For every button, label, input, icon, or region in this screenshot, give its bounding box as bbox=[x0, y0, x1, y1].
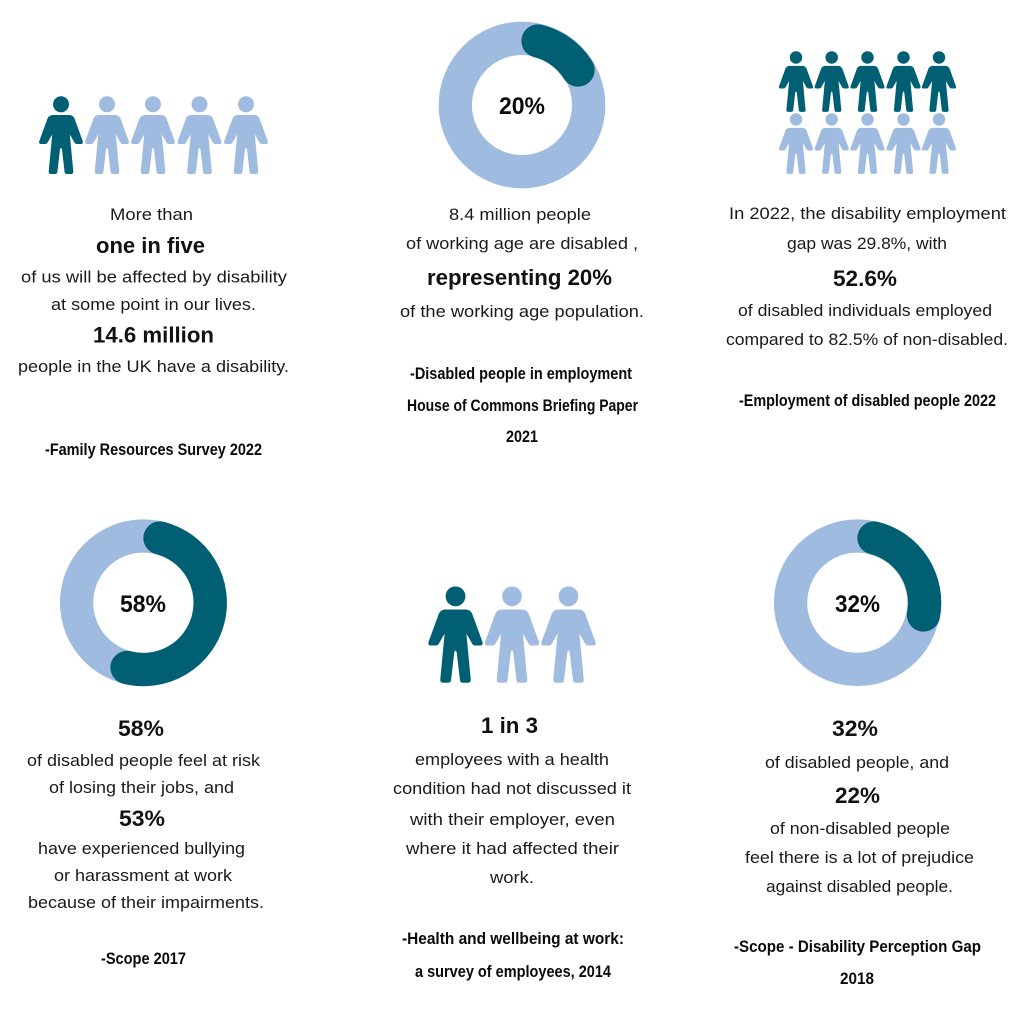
citation: Scope Disability Perception Gap bbox=[734, 937, 981, 988]
citation: House of Commons Briefing Paper: House of Commons Briefing Paper bbox=[407, 396, 638, 415]
citation: Scope Disability Perception Gap: 2018 bbox=[840, 969, 874, 988]
text: job risk statistics: or harassment at work bbox=[54, 866, 233, 885]
panel: disability employment gap bbox=[726, 51, 1008, 410]
text: health condition statistics: employees with a health bbox=[415, 750, 609, 769]
text: job risk statistics: of losing their jobs, and bbox=[49, 778, 234, 797]
text: prejudice statistics: against disabled people. bbox=[766, 877, 953, 896]
text: working age statistics bbox=[400, 205, 644, 321]
donut chart: 32% bbox=[791, 536, 925, 669]
text: working age statistics: of the working age population. bbox=[400, 302, 644, 321]
text: working age statistics: representing 20% bbox=[427, 265, 612, 290]
panel: one in three employees bbox=[393, 586, 631, 981]
icon: five people, one highlighted bbox=[39, 96, 268, 174]
citation: Health and wellbeing at work: -Health and wellbeing at work: bbox=[402, 929, 624, 948]
text: job risk statistics: have experienced bullying bbox=[38, 839, 245, 858]
text: prejudice statistics: of non-disabled people bbox=[770, 819, 950, 838]
text: health condition statistics: where it had affected their bbox=[405, 839, 619, 858]
text: one in five statistics: of us will be affected by disability bbox=[21, 268, 288, 286]
text: prejudice statistics: of disabled people, and bbox=[765, 753, 949, 772]
text: working age statistics: 8.4 million people bbox=[449, 205, 591, 224]
citation: Family Resources Survey: -Family Resources Survey 2022 bbox=[45, 440, 262, 459]
text: one in five statistics: people in the UK have a disability. bbox=[18, 357, 289, 376]
citation: Scope 2017: -Scope 2017 bbox=[101, 949, 186, 968]
text: employment gap statistics: In 2022, the disability employment bbox=[729, 204, 1006, 223]
donut chart: 32%: 32% bbox=[835, 591, 880, 618]
text: employment gap statistics: of disabled individuals employed bbox=[738, 301, 992, 320]
text: one in five statistics: one in five bbox=[96, 233, 205, 258]
donut chart: 20%: 20% bbox=[499, 93, 545, 120]
panel: 20 percent of working age bbox=[400, 38, 644, 446]
text: employment gap statistics bbox=[726, 204, 1008, 349]
text: job risk statistics: 53% bbox=[119, 806, 165, 831]
donut chart: 20% bbox=[455, 38, 589, 172]
text: one in five statistics: More than bbox=[110, 205, 193, 224]
donut chart: 58% bbox=[77, 536, 210, 670]
donut chart: 58%: 58% bbox=[120, 591, 166, 618]
text: health condition statistics: condition had not discussed it bbox=[393, 779, 631, 798]
text: prejudice statistics: 32% bbox=[832, 716, 878, 741]
panel: risk of losing jobs bbox=[27, 536, 264, 968]
text: one in five statistics bbox=[18, 205, 289, 376]
citation: Health and wellbeing at work: a survey of employees, 2014 bbox=[415, 962, 611, 981]
text: prejudice statistics: feel there is a lot of prejudice bbox=[745, 848, 974, 867]
icon: ten people, five highlighted bbox=[779, 51, 956, 174]
text: employment gap statistics: compared to 82.5% of non-disabled. bbox=[726, 330, 1008, 349]
text: employment gap statistics: 52.6% bbox=[833, 266, 897, 291]
text: job risk statistics bbox=[27, 716, 264, 912]
text: prejudice statistics: 22% bbox=[835, 783, 880, 808]
text: job risk statistics: 58% bbox=[118, 716, 164, 741]
text: employment gap statistics: gap was 29.8%, with bbox=[787, 234, 947, 253]
text: health condition statistics: with their employer, even bbox=[409, 810, 615, 829]
citation: Scope Disability Perception Gap: -Scope - Disability Perception Gap bbox=[734, 937, 981, 956]
text: job risk statistics: of disabled people feel at risk bbox=[27, 751, 261, 770]
panel: prejudice perception bbox=[734, 536, 981, 988]
panel: one in five bbox=[18, 96, 289, 459]
citation: House of Commons Briefing Paper: -Disabled people in employment bbox=[410, 364, 632, 383]
text: health condition statistics bbox=[393, 713, 631, 887]
citation: Health and wellbeing at work bbox=[402, 929, 624, 981]
text: job risk statistics: because of their impairments. bbox=[28, 893, 264, 912]
citation: House of Commons Briefing Paper bbox=[407, 364, 638, 446]
text: health condition statistics: 1 in 3 bbox=[481, 713, 538, 738]
text: working age statistics: of working age are disabled , bbox=[406, 234, 638, 253]
text: prejudice statistics bbox=[745, 716, 974, 896]
text: health condition statistics: work. bbox=[489, 868, 534, 887]
citation: House of Commons Briefing Paper: 2021 bbox=[506, 427, 538, 446]
text: one in five statistics: 14.6 million bbox=[93, 322, 214, 348]
icon: three people, one highlighted bbox=[428, 586, 596, 683]
text: one in five statistics: at some point in our lives. bbox=[51, 295, 256, 314]
